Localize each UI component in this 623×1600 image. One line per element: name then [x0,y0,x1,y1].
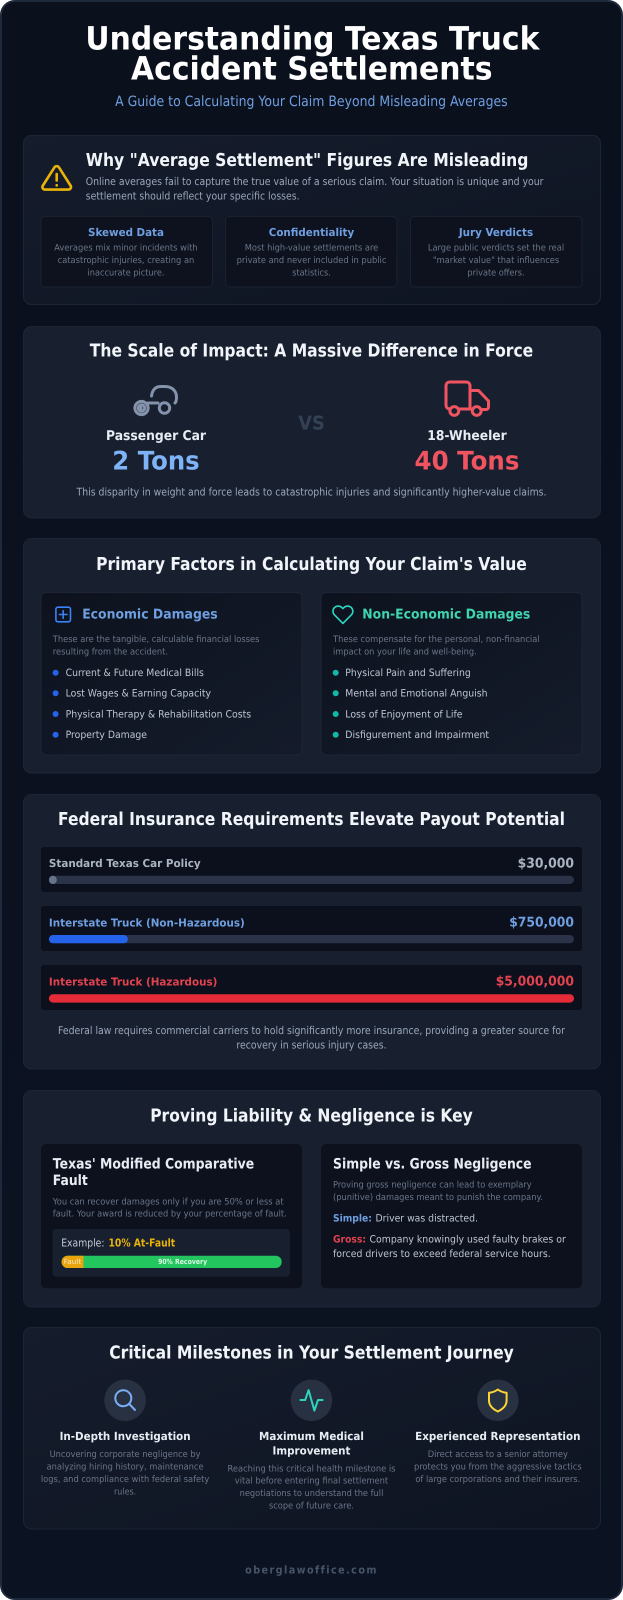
panel: misleading averages [24,136,600,304]
car label: Passenger Car [106,429,206,444]
card: skewed data: inaccurate picture. [88,268,164,278]
milestone: maximum medical improvement: Reaching this critical health milestone is [228,1464,396,1474]
icon: car [135,386,176,415]
milestone: experienced representation: of large corporations and their insurers. [415,1475,580,1485]
card: comparative fault: fault. Your award is reduced by your percentage of fault. [53,1210,287,1220]
example box [52,1229,290,1277]
card: comparative fault: Fault [53,1173,88,1189]
heading: Primary Factors in Calculating Your Claim's Value [96,554,527,575]
title: Understanding Texas Truck [85,19,540,57]
icon: plus square [56,607,70,622]
card: comparative fault: You can recover damages only if you are 50% or less at [52,1197,284,1207]
milestone: maximum medical improvement [228,1380,396,1512]
card: simple vs gross negligence: Proving gross negligence can lead to exemplary [333,1181,532,1191]
heading: Critical Milestones in Your Settlement Journey [109,1342,514,1363]
panel: scale of impact [24,326,600,518]
list: economic items [53,668,251,741]
card: economic damages: resulting from the accident. [53,647,168,657]
icon: truck [446,382,488,415]
fault bar: 90% Recovery [158,1257,207,1266]
truck label: 40 Tons [415,447,519,477]
footer: oberglawoffice.com [245,1563,378,1576]
card: jury verdicts [410,216,582,287]
heading: Federal Insurance Requirements Elevate Payout Potential [58,809,565,830]
card: simple vs gross negligence: Driver was distracted. [376,1214,478,1225]
card: skewed data: Skewed Data [88,226,164,239]
card: comparative fault: Texas' Modified Comparative [53,1156,254,1172]
milestone: experienced representation: Experienced Representation [415,1430,580,1443]
intro text: settlement should reflect your specific losses. [86,190,300,202]
card: simple vs gross negligence: Company knowingly used faulty brakes or [370,1234,567,1245]
list: economic items: Physical Therapy & Rehabilitation Costs [66,709,251,720]
row: non-hazardous truck: Interstate Truck (Non-Hazardous) [49,916,245,929]
example box: Example: [61,1237,104,1250]
caption: Federal law requires commercial carriers to hold significantly more insurance, providing a greater source for [58,1024,566,1037]
card: confidentiality [226,216,397,287]
icon: shield [477,1380,519,1421]
card: non-economic damages: These compensate for the personal, non-financial [332,635,540,645]
milestone: maximum medical improvement: negotiations to understand the full [240,1489,383,1499]
card: simple vs gross negligence: forced drivers to exceed federal service hours. [333,1249,551,1260]
panel: liability and negligence [24,1090,600,1307]
row: hazardous truck: Interstate Truck (Hazardous) [49,975,217,988]
caption: recovery in serious injury cases. [236,1039,387,1052]
card: jury verdicts: Large public verdicts set the real [428,244,564,254]
list: economic items: Property Damage [66,730,147,741]
card: comparative fault [41,1144,302,1288]
icon: magnifier [104,1380,146,1421]
milestone: investigation: Uncovering corporate negligence by [50,1450,201,1460]
icon: heart [333,606,353,623]
example box: 10% At-Fault [108,1237,175,1250]
caption [58,1024,566,1052]
truck label [415,429,519,477]
row: standard car policy: $30,000 [518,856,574,871]
heading: Why "Average Settlement" Figures Are Misleading [86,150,528,171]
card: confidentiality: statistics. [292,268,331,278]
card: skewed data: Averages mix minor incidents with [54,244,198,254]
panel: federal insurance [24,794,600,1069]
milestone: investigation: logs, and compliance with federal safety [41,1475,210,1485]
list: non-economic items: Loss of Enjoyment of Life [345,709,462,720]
card: simple vs gross negligence: Simple: [333,1214,372,1225]
icon: pulse [291,1380,332,1421]
icon: warning triangle [42,166,71,190]
heading: The Scale of Impact: A Massive Difference in Force [90,341,533,362]
card: skewed data: catastrophic injuries, creating an [58,256,194,266]
subtitle: A Guide to Calculating Your Claim Beyond Misleading Averages [115,94,508,110]
card: confidentiality: Confidentiality [269,226,354,239]
milestone: investigation: In-Depth Investigation [60,1430,191,1443]
row: hazardous truck: $5,000,000 [496,975,574,990]
milestone: maximum medical improvement: vital before entering final settlement [235,1477,389,1487]
card: economic damages: These are the tangible, calculable financial losses [52,635,260,645]
title: Accident Settlements [131,50,493,88]
row: standard car policy [41,847,582,892]
car label: 2 Tons [112,447,200,477]
list: non-economic items [333,668,489,741]
car label [106,429,206,477]
milestone: experienced representation: protects you from the aggressive tactics [414,1462,582,1472]
list: non-economic items: Disfigurement and Impairment [345,730,489,741]
heading: Proving Liability & Negligence is Key [150,1106,473,1127]
milestone: experienced representation: Direct access to a senior attorney [428,1450,569,1460]
milestone: maximum medical improvement: Improvement [273,1445,351,1458]
list: economic items: Lost Wages & Earning Capacity [66,689,211,700]
row: non-hazardous truck [41,906,582,951]
card: economic damages: Economic Damages [82,606,218,622]
milestone: investigation: analyzing hiring history, maintenance [47,1462,204,1472]
milestone: experienced representation [414,1380,582,1485]
intro text: Online averages fail to capture the true value of a serious claim. Your situation is unique and your [86,175,544,188]
card: non-economic damages: Non-Economic Damages [362,606,530,622]
card: jury verdicts: "market value" that influences [433,256,559,266]
panel: critical milestones [24,1328,600,1529]
milestone: maximum medical improvement: scope of future care. [269,1502,354,1512]
card: jury verdicts: private offers. [467,268,525,278]
title [85,19,540,87]
milestone: investigation [41,1380,210,1497]
row: hazardous truck [41,965,582,1010]
card: economic damages [41,592,302,755]
intro text [86,175,544,202]
row: standard car policy: Standard Texas Car Policy [49,857,201,870]
vs label: VS [298,412,325,434]
card: simple vs gross negligence: Gross: [333,1234,366,1245]
header [85,19,540,110]
card: skewed data [41,216,212,287]
card: confidentiality: private and never included in public [237,256,386,266]
card: confidentiality: Most high-value settlements are [245,244,379,254]
card: non-economic damages [321,592,582,755]
milestone: maximum medical improvement: Maximum Medical [259,1430,364,1443]
caption: This disparity in weight and force leads to catastrophic injuries and significantly higher-value claims. [76,486,547,499]
panel: primary factors [24,538,600,773]
milestone: investigation: rules. [114,1487,136,1497]
fault bar: Fault [64,1257,81,1266]
truck label: 18-Wheeler [427,429,507,444]
card: simple vs gross negligence: (punitive) damages meant to punish the company. [333,1193,543,1203]
list: non-economic items: Physical Pain and Suffering [345,668,471,679]
row: non-hazardous truck: $750,000 [509,916,574,931]
card: jury verdicts: Jury Verdicts [458,226,533,239]
card: non-economic damages: impact on your life and well-being. [333,647,477,657]
list: economic items: Current & Future Medical Bills [66,668,204,679]
list: non-economic items: Mental and Emotional Anguish [345,689,488,700]
card: simple vs gross negligence [321,1144,582,1288]
card: simple vs gross negligence: Simple vs. Gross Negligence [333,1156,532,1172]
fault bar [62,1256,282,1268]
